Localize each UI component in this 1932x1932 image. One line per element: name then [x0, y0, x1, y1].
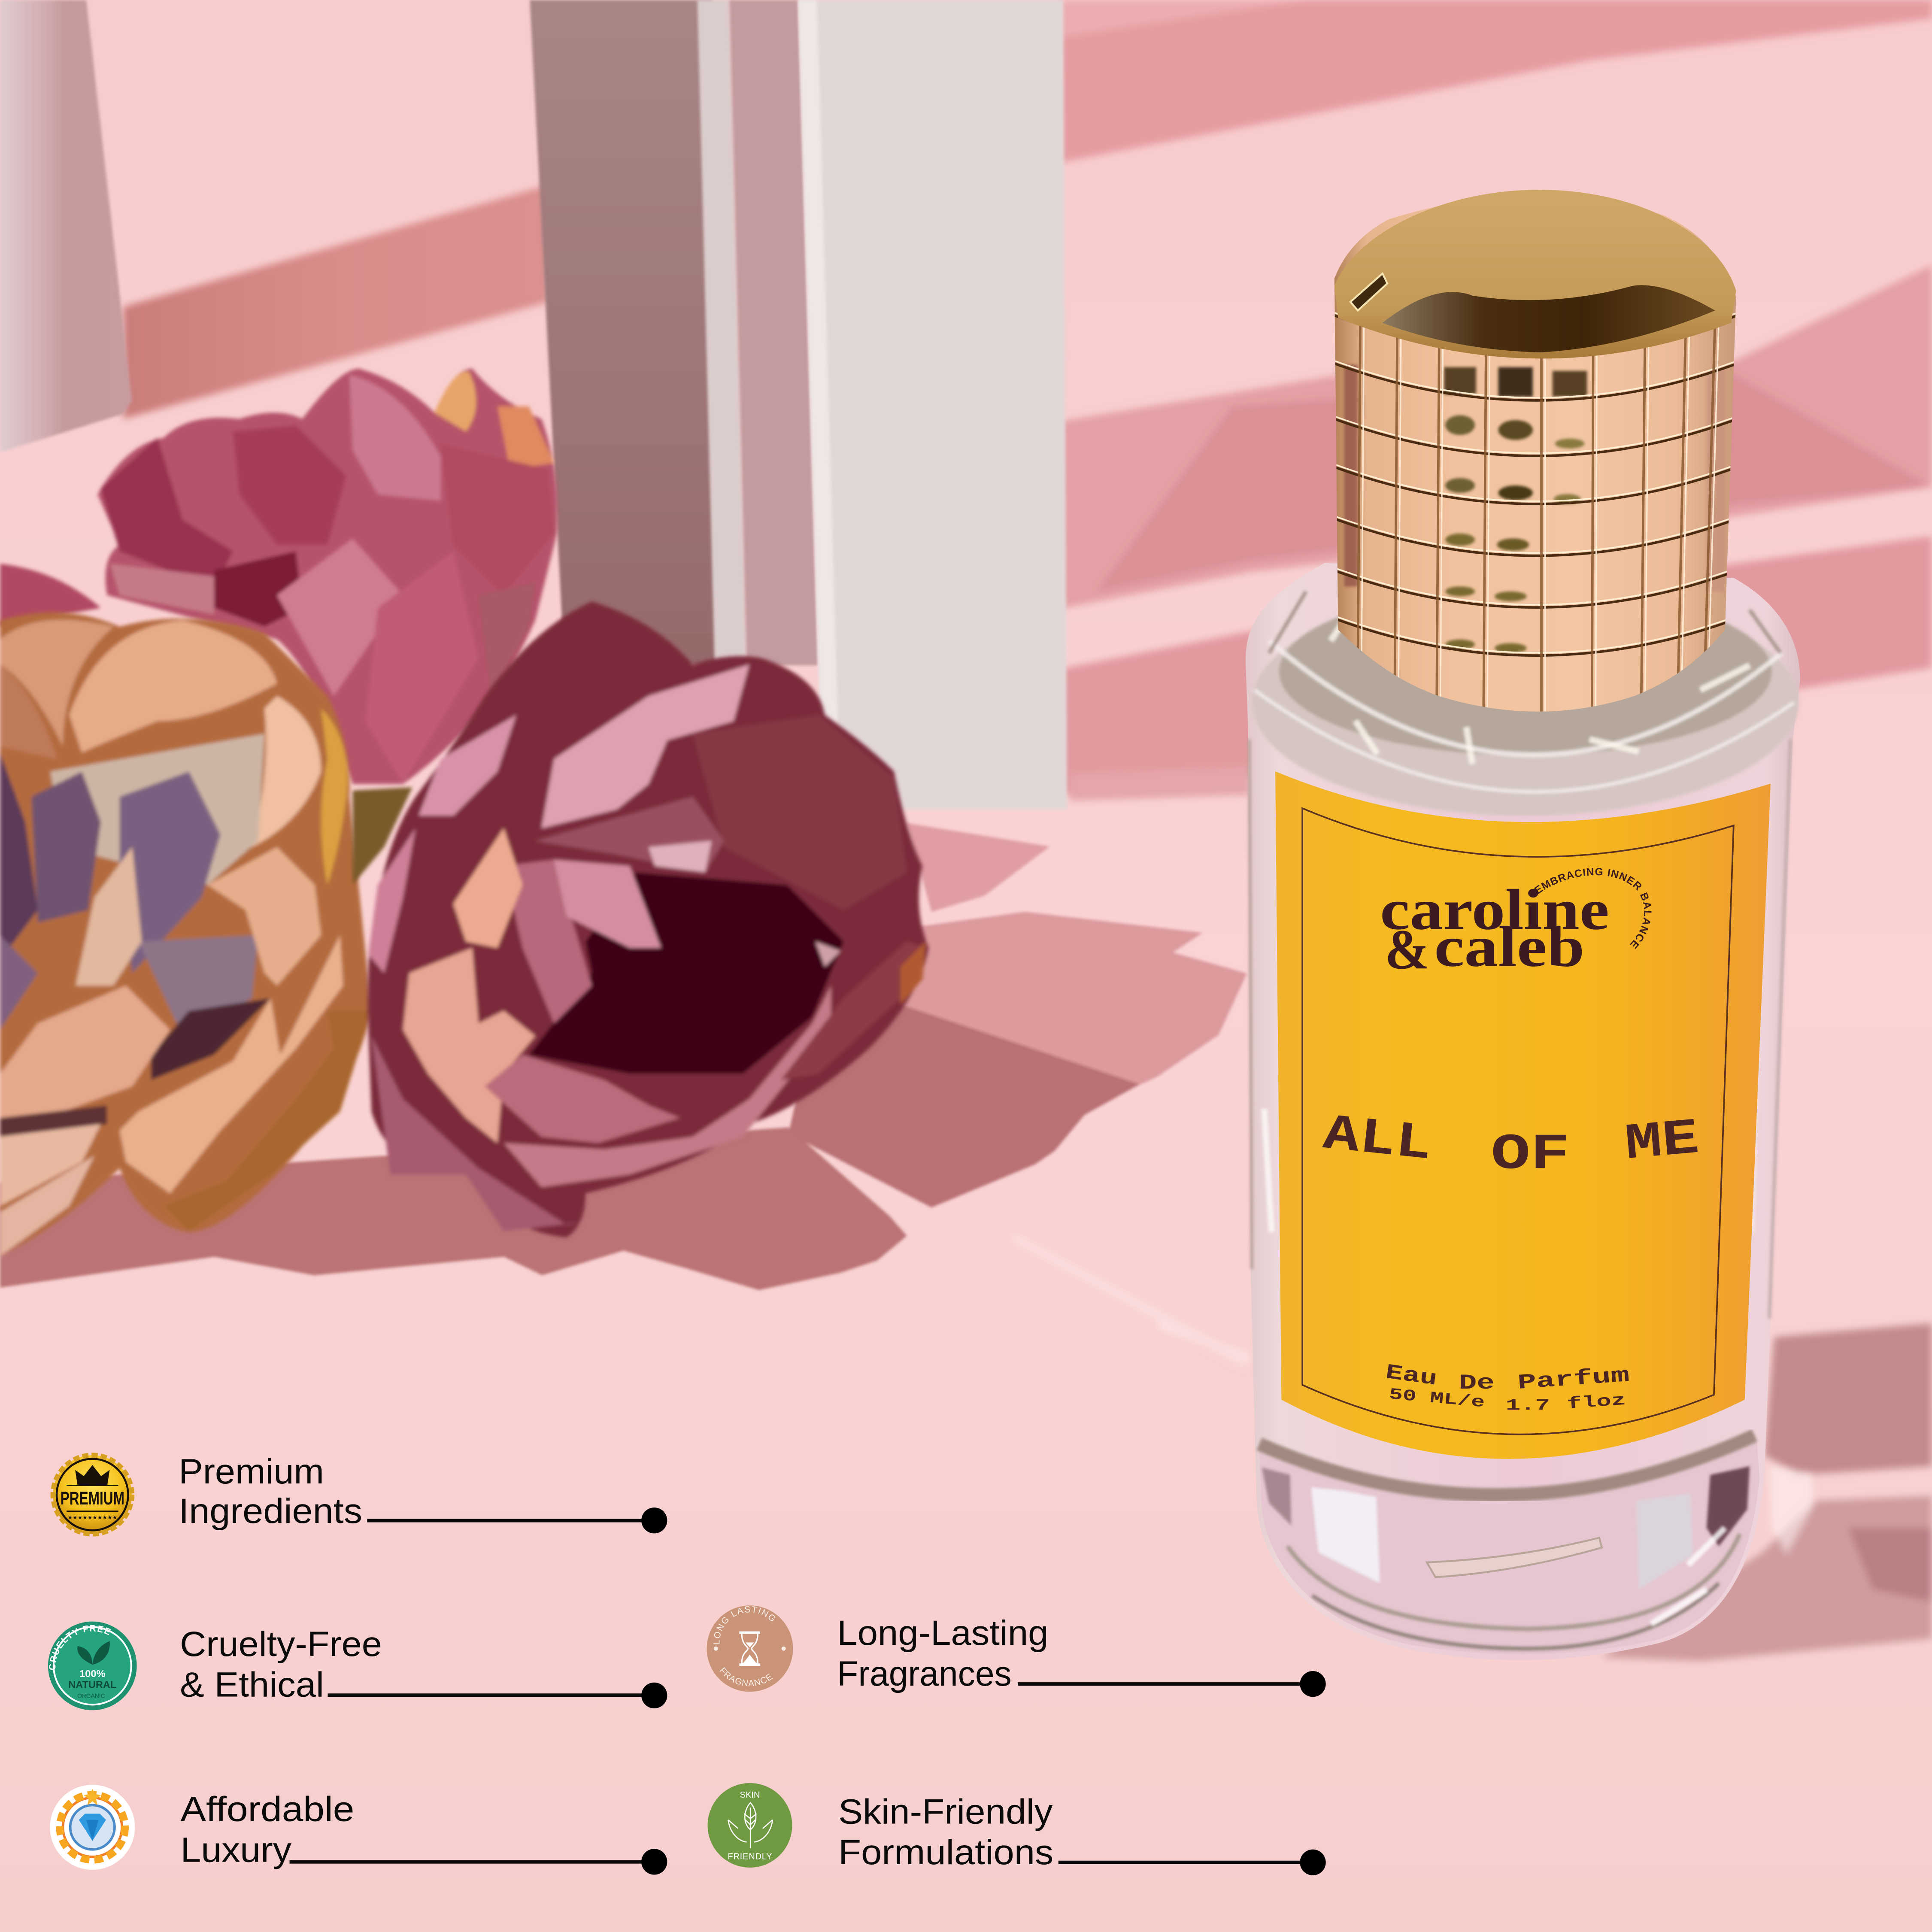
icon: skin friendly badge: FRIENDLY	[728, 1852, 772, 1862]
cap reflections	[1344, 365, 1725, 653]
brand logo: EMBRACING INNER BALANCE	[1532, 866, 1653, 951]
label: premium ingredients	[179, 1452, 362, 1531]
centre pillar inner face	[729, 0, 818, 665]
eau de parfum lines: De	[1459, 1371, 1495, 1395]
product name: OF	[1491, 1126, 1570, 1183]
eau de parfum lines: 1.7	[1506, 1397, 1550, 1415]
bottle cast shadow on floor	[1602, 1323, 1932, 1661]
icon: hourglass badge: LONG LASTING	[712, 1604, 778, 1645]
brand logo: caleb	[1434, 915, 1585, 979]
product name	[1320, 1106, 1701, 1183]
icon: cruelty free badge: 100%	[79, 1668, 105, 1679]
right pillar bright edge	[798, 0, 840, 810]
flowers	[0, 369, 929, 1256]
right pillar front face	[798, 0, 1067, 810]
green leaf between flowers	[352, 787, 412, 885]
icon: hourglass badge: FRAGNANCE	[718, 1665, 775, 1689]
eau de parfum lines: Eau	[1384, 1360, 1439, 1391]
bottle base	[1259, 1435, 1759, 1654]
feature: skin-friendly formulations	[708, 1783, 1326, 1875]
feature: affordable luxury	[50, 1785, 667, 1875]
centre pillar shaded side	[530, 0, 739, 665]
icon: cruelty free badge: CRUELTY FREE	[47, 1623, 113, 1671]
icon: cruelty free badge: ORGANIC	[77, 1693, 105, 1699]
far-left pillar	[0, 0, 132, 452]
gold cap	[1335, 190, 1737, 727]
icon: hourglass badge	[707, 1604, 793, 1692]
floor light streaks	[1013, 1232, 1814, 1555]
centre pillar light edge	[698, 0, 747, 665]
product name: ME	[1623, 1110, 1701, 1174]
perfume bottle	[1246, 190, 1800, 1660]
eau de parfum lines: Parfum	[1517, 1363, 1630, 1395]
connector line	[328, 1683, 667, 1708]
icon: diamond laurel	[50, 1785, 135, 1870]
icon: premium gold seal: PREMIUM	[61, 1488, 124, 1509]
icon: cruelty free badge	[47, 1622, 137, 1710]
cap reflection crescent	[1383, 285, 1715, 352]
icon: cruelty free badge: NATURAL	[68, 1679, 116, 1690]
brand logo: caroline	[1380, 878, 1609, 942]
icon: skin friendly badge: SKIN	[740, 1790, 760, 1800]
label: affordable luxury	[181, 1790, 354, 1869]
label: long-lasting fragrances: Long-Lasting	[837, 1614, 1049, 1653]
label: skin-friendly formulations	[838, 1792, 1053, 1872]
label: skin-friendly formulations: Formulations	[838, 1833, 1053, 1872]
feature: premium ingredients	[53, 1452, 667, 1534]
back peony	[0, 369, 558, 784]
label: cruelty-free and ethical	[180, 1625, 382, 1705]
left peach peony	[0, 613, 371, 1256]
brand logo	[1380, 866, 1653, 981]
label: skin-friendly formulations: Skin-Friendly	[838, 1792, 1053, 1831]
label: premium ingredients: Premium	[179, 1452, 324, 1491]
feature: cruelty-free and ethical	[47, 1622, 667, 1710]
connector line	[1059, 1850, 1326, 1875]
label: affordable luxury: Affordable	[181, 1790, 354, 1829]
feature: long-lasting fragrances	[707, 1604, 1326, 1697]
eau de parfum lines: 50 ML/e	[1388, 1386, 1486, 1412]
connector line	[1018, 1671, 1326, 1697]
glass edges	[1250, 739, 1790, 1318]
connector line	[367, 1507, 667, 1533]
glass neck and shoulder	[1252, 588, 1799, 816]
eau de parfum lines: floz	[1566, 1391, 1627, 1413]
icon: premium gold seal	[53, 1455, 132, 1534]
cap top	[1335, 190, 1736, 358]
label: affordable luxury: Luxury	[181, 1830, 291, 1869]
product name: ALL	[1320, 1106, 1434, 1174]
icon: skin friendly badge	[708, 1783, 792, 1868]
white pillars	[0, 0, 1067, 810]
label: premium ingredients: Ingredients	[179, 1492, 362, 1531]
label: cruelty-free and ethical: & Ethical	[180, 1665, 324, 1705]
cap grid rows	[1335, 315, 1737, 655]
connector line	[290, 1849, 667, 1875]
front maroon peony	[368, 601, 929, 1237]
label: long-lasting fragrances: Fragrances	[837, 1654, 1012, 1693]
label: long-lasting fragrances	[837, 1614, 1049, 1693]
label	[1275, 771, 1771, 1459]
label: cruelty-free and ethical: Cruelty-Free	[180, 1625, 382, 1664]
cap grid columns	[1358, 318, 1715, 727]
flower shadows on floor	[0, 823, 1247, 1290]
glass body	[1246, 563, 1800, 1660]
icon: premium gold seal: ★★★★★★★★★★	[67, 1514, 117, 1521]
eau de parfum lines	[1384, 1360, 1630, 1415]
cap notch highlight	[1350, 273, 1387, 310]
brand logo: &	[1385, 918, 1429, 981]
